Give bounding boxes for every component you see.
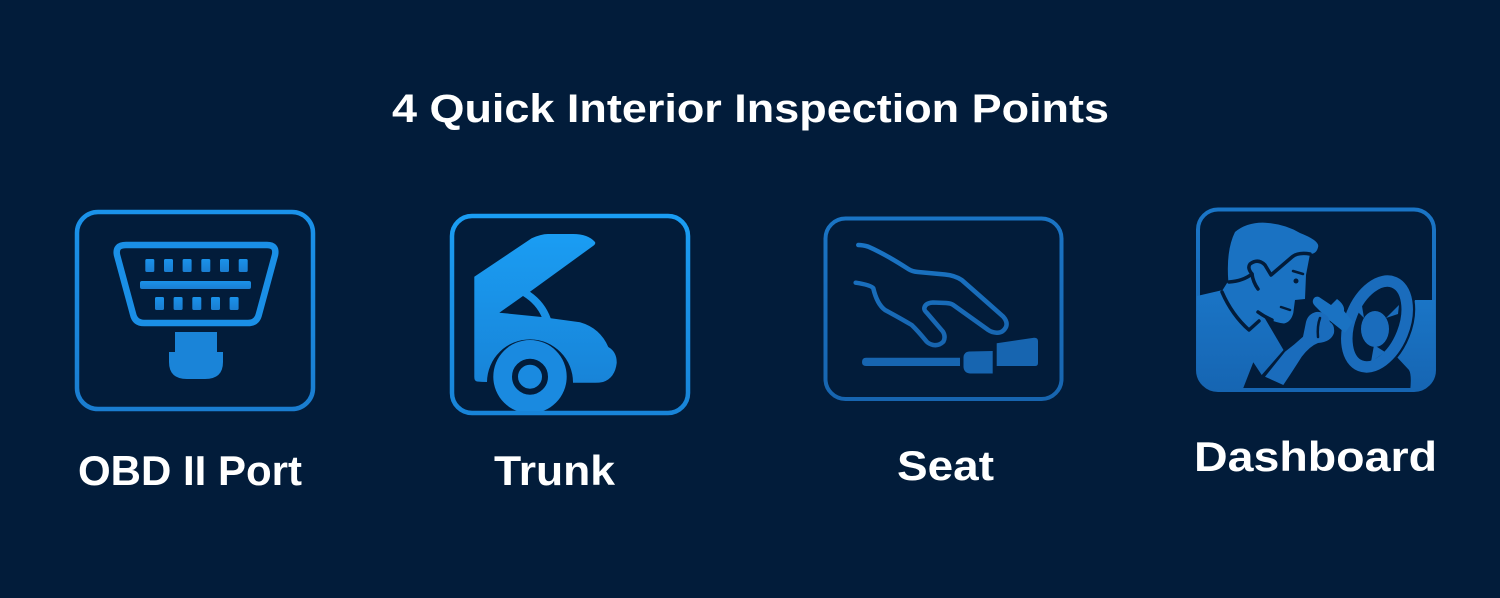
label: Dashboard: Dashboard: [1194, 433, 1437, 480]
steering wheel: [1396, 300, 1416, 358]
shirt: [1197, 290, 1284, 392]
eye, brow, mouth: [1294, 278, 1298, 284]
panel: OBD II Port: [77, 212, 313, 494]
title: 4 Quick Interior Inspection Points: [392, 87, 1109, 131]
label: Trunk: Trunk: [494, 447, 616, 494]
icon: hand outline: [856, 245, 1007, 345]
dashboard: [1398, 300, 1435, 388]
icon: car with open trunk: [474, 234, 617, 413]
label: OBD II Port: OBD II Port: [78, 447, 302, 494]
arm and hand: [1265, 312, 1334, 385]
icon: OBD plug: [169, 332, 223, 379]
head and hair: [1222, 223, 1318, 330]
collar and jaw: [1222, 292, 1272, 330]
icon frame: Seat: [826, 218, 1062, 399]
icon: OBD connector: [117, 245, 275, 323]
icon frame: Dashboard: [1198, 210, 1434, 390]
icon: person inspecting dashboard: [1197, 223, 1436, 392]
icon frame: Trunk: [452, 216, 688, 413]
hair line and ear: [1229, 253, 1310, 282]
panel: Seat: [826, 218, 1062, 489]
panel: Trunk: [452, 216, 688, 494]
label: Seat: Seat: [897, 442, 994, 489]
icon: trim tool: [862, 338, 1038, 374]
tool: [1312, 296, 1346, 330]
icon frame: OBD II Port: [77, 212, 313, 409]
panel: Dashboard: [1194, 210, 1437, 480]
